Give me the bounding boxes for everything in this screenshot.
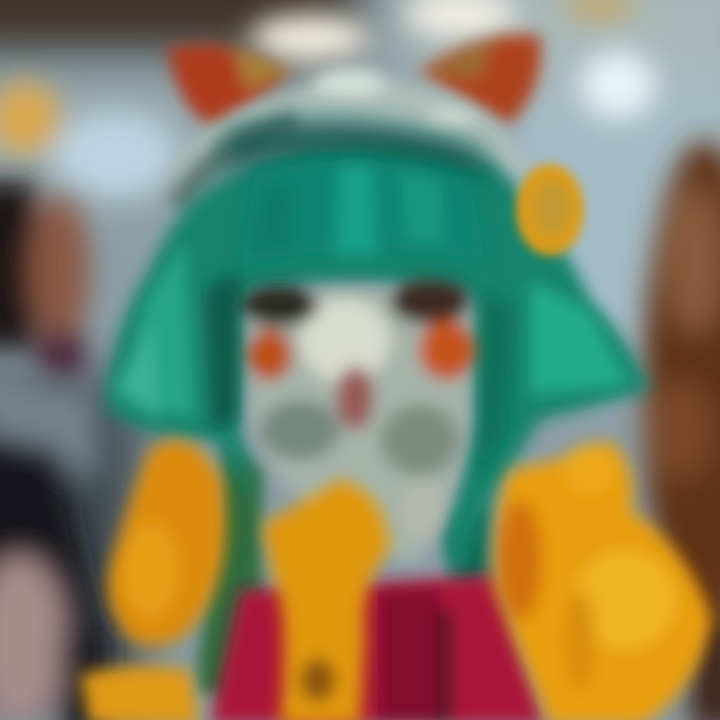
center bow xyxy=(262,480,390,720)
background lights xyxy=(0,0,656,197)
red dress xyxy=(210,575,545,720)
right background figure xyxy=(643,140,720,720)
nose and mouth xyxy=(336,366,374,430)
yellow hair pin xyxy=(516,164,584,256)
yellow ruffled sleeves and bow xyxy=(80,440,712,720)
left background figure xyxy=(0,180,110,720)
eye: left xyxy=(242,286,318,381)
hair highlights xyxy=(225,123,490,180)
green hair xyxy=(105,123,650,585)
ears xyxy=(168,35,541,130)
dark green under-layer by the neck xyxy=(195,440,490,700)
left sleeve xyxy=(108,440,226,646)
white frill headband xyxy=(165,68,530,215)
right sleeve xyxy=(494,440,712,720)
eye: right xyxy=(390,280,475,380)
face xyxy=(242,280,475,565)
